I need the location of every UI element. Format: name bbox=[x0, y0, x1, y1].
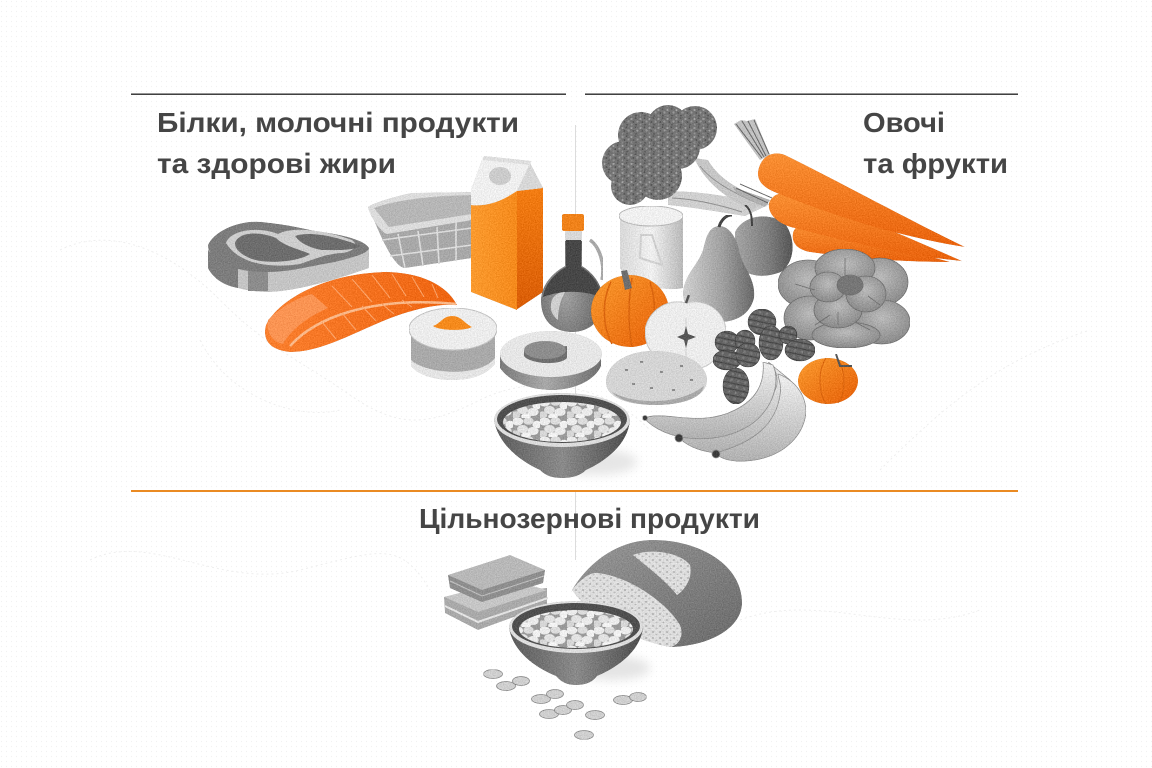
heading: proteins, dairy and healthy fats: та здорові жири bbox=[157, 148, 396, 179]
shadow: grain bowl bbox=[574, 656, 650, 680]
illustration: small orange bbox=[798, 354, 858, 404]
illustration: apple behind pear bbox=[735, 205, 793, 276]
illustration: steak bbox=[208, 222, 369, 292]
shadow: bean bowl bbox=[553, 449, 637, 475]
illustration: round cheese bbox=[500, 331, 602, 390]
illustration: potato bbox=[606, 351, 707, 405]
illustration: white can bbox=[619, 206, 683, 289]
vertical plate divider bbox=[574, 125, 576, 560]
illustration: broccoli bbox=[602, 105, 770, 216]
heading: vegetables and fruits: Овочі bbox=[863, 107, 945, 138]
illustration: crackers bbox=[444, 555, 548, 630]
illustration: salmon fillet bbox=[265, 272, 457, 352]
heading: whole grain products: Цільнозернові продукти bbox=[419, 503, 760, 534]
heading: vegetables and fruits: та фрукти bbox=[863, 148, 1008, 179]
heading: vegetables and fruits bbox=[863, 107, 1008, 179]
illustration: pumpkin bbox=[591, 270, 669, 347]
illustration: scattered lentils bbox=[484, 670, 646, 740]
heading: proteins, dairy and healthy fats: Білки, молочні продукти bbox=[157, 107, 519, 138]
illustration: bowl of grain bbox=[509, 601, 643, 685]
illustration: orange carton bbox=[471, 156, 543, 310]
top left rule bbox=[131, 94, 566, 95]
illustration: carrots bbox=[733, 119, 965, 262]
illustration: halved apple bbox=[645, 295, 726, 368]
illustration: tin with egg yolk bbox=[409, 308, 497, 380]
illustration: dark berries bbox=[713, 309, 815, 404]
illustration: bowl of beans bbox=[494, 393, 630, 478]
illustration: pear bbox=[683, 215, 754, 322]
illustration: butter dish basket bbox=[368, 192, 472, 268]
illustration: oil bottle bbox=[541, 214, 603, 332]
heading: proteins, dairy and healthy fats bbox=[157, 107, 519, 179]
illustration: bread loaf bbox=[572, 540, 742, 647]
illustration: lettuce bbox=[778, 249, 910, 348]
orange horizontal rule bbox=[131, 490, 1018, 492]
top right rule bbox=[585, 94, 1018, 95]
illustration: bananas bbox=[642, 362, 806, 461]
